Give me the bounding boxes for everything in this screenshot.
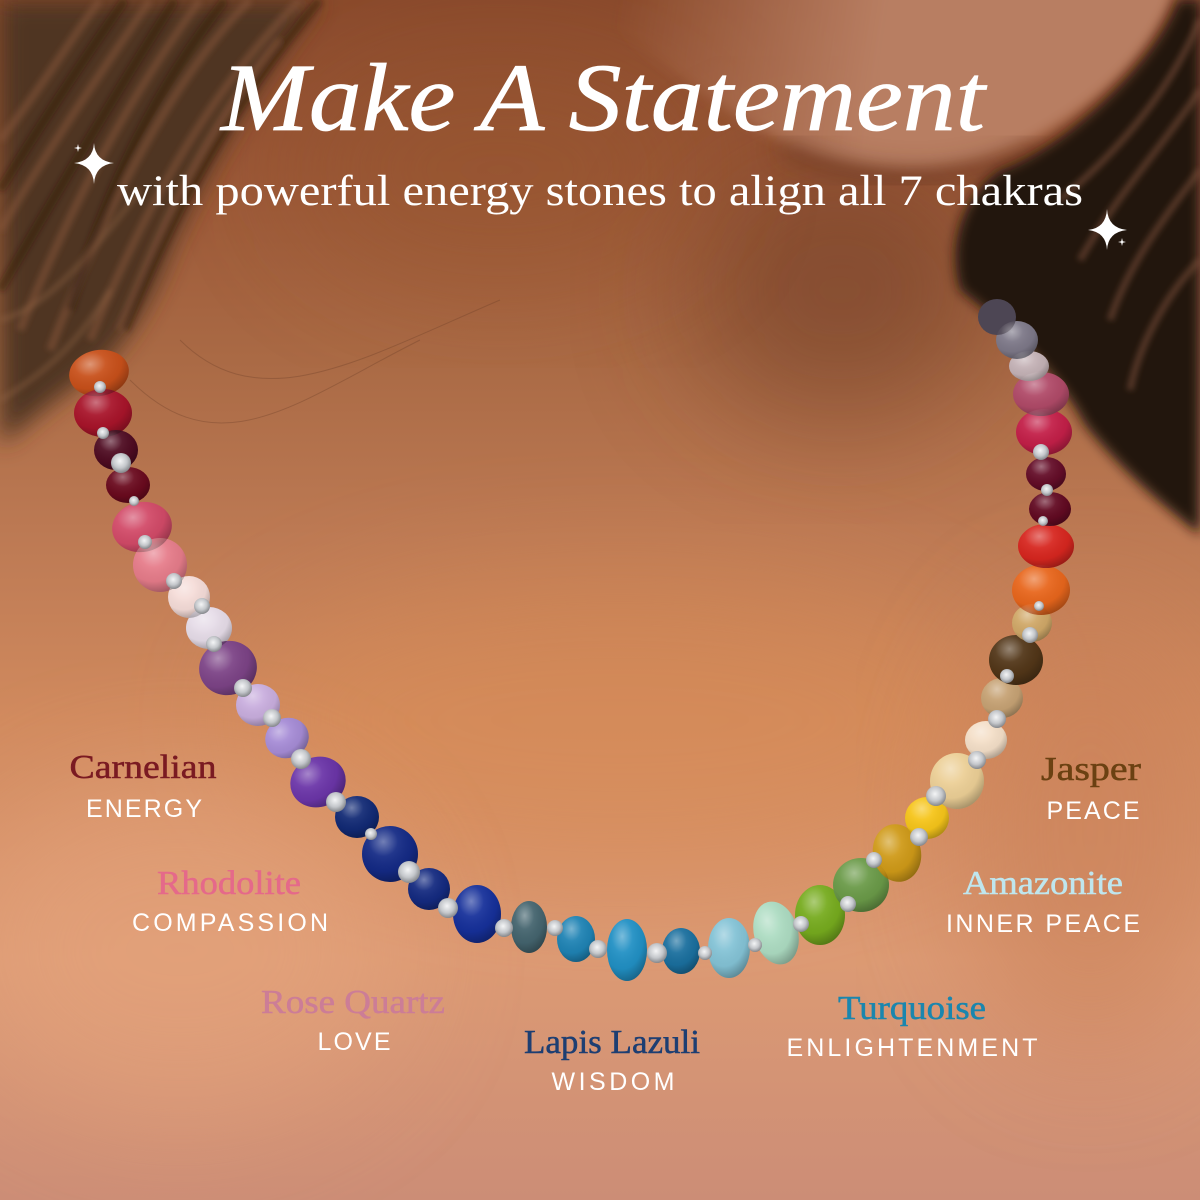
gemstone beads [65,299,1074,981]
label: Jasper: PEACE [1046,797,1140,825]
title: Make A Statement [219,44,988,151]
label: Carnelian: Carnelian [70,749,216,786]
label: Rose Quartz: Rose Quartz [261,984,445,1021]
stray hair strands [130,300,500,423]
silver spacer beads [94,381,1053,963]
necklace [65,299,1074,981]
label: Jasper [1041,751,1142,825]
label: Rose Quartz: LOVE [318,1028,390,1056]
icon: sparkle left [74,143,114,184]
label: Rose Quartz [261,984,445,1056]
label: Rhodolite: Rhodolite [157,865,301,902]
chin [560,0,1178,168]
label: Carnelian: ENERGY [86,795,202,823]
label: Amazonite: Amazonite [963,865,1123,902]
label: Rhodolite: COMPASSION [132,909,328,937]
bead highlights [65,321,1074,981]
right hair [956,0,1200,535]
label: Jasper: Jasper [1041,751,1142,788]
label: Lapis Lazuli: Lapis Lazuli [524,1024,700,1061]
label: Turquoise: ENLIGHTENMENT [786,1034,1038,1062]
icon: sparkle right [1088,209,1127,250]
label: Carnelian [70,749,216,823]
left hair [0,0,320,445]
label: Turquoise: Turquoise [838,990,986,1027]
label: Amazonite [946,865,1140,938]
label: Turquoise [786,990,1038,1062]
label: Amazonite: INNER PEACE [946,910,1140,938]
subtitle: with powerful energy stones to align all 7 chakras [117,168,1083,215]
label: Lapis Lazuli: WISDOM [552,1068,674,1096]
label: Lapis Lazuli [524,1024,700,1096]
label: Rhodolite [132,865,328,937]
